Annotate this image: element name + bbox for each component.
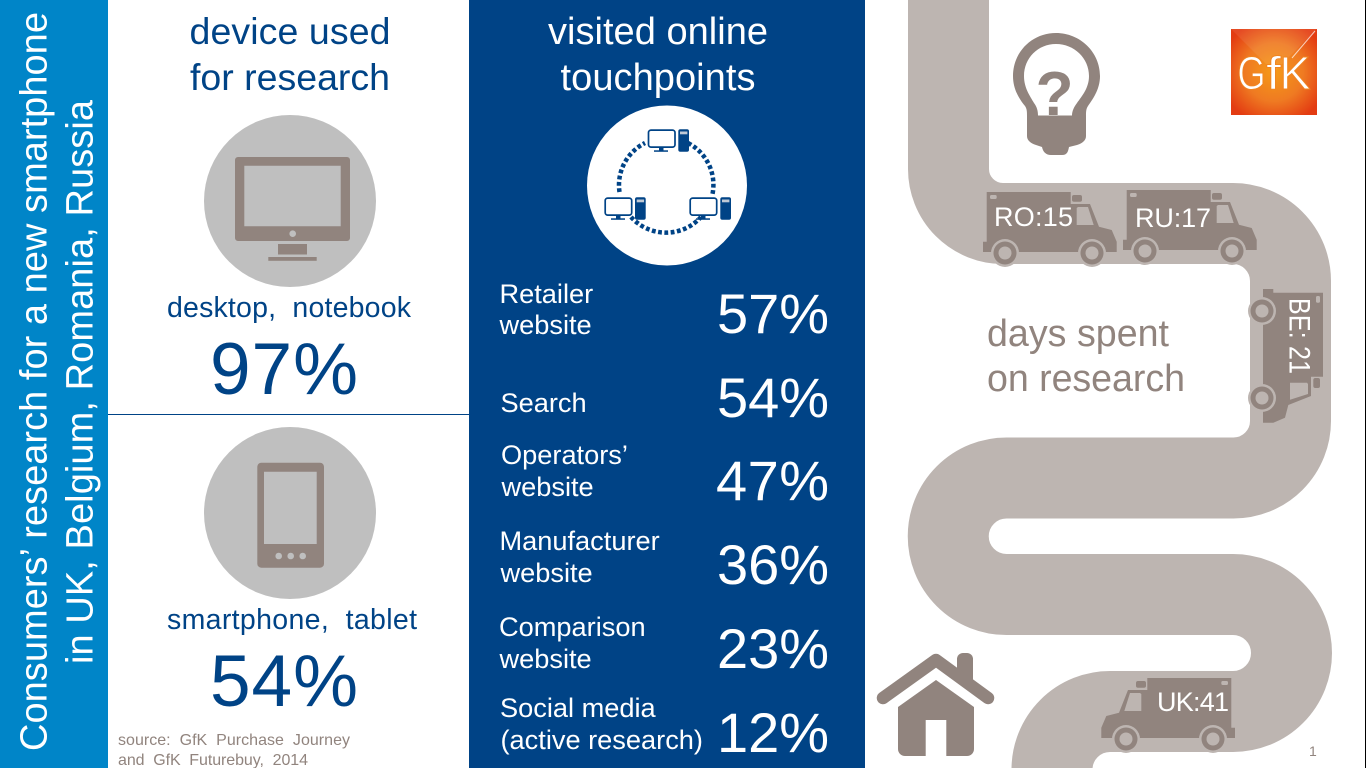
touchpoint: manufacturer website xyxy=(500,525,829,596)
touchpoint: manufacturer website: Manufacturer xyxy=(500,525,660,556)
logo: GfK: K xyxy=(1280,47,1310,99)
truck: UK xyxy=(1101,678,1235,753)
icon: connected computers xyxy=(587,106,747,266)
touchpoint: retailer website: 57% xyxy=(717,282,829,345)
touchpoint: operators' website: Operators’ xyxy=(501,439,628,470)
truck: BE xyxy=(1248,289,1323,423)
panel: device used for research xyxy=(108,10,469,768)
touchpoint: social media: 12% xyxy=(717,701,829,764)
touchpoint: comparison website: 23% xyxy=(717,617,829,680)
touchpoint: search: 54% xyxy=(717,366,829,429)
stat: 97%: 97% xyxy=(210,329,358,410)
truck: RU xyxy=(1123,190,1257,265)
truck: RO: RO:15 xyxy=(994,202,1073,232)
divider line xyxy=(108,414,469,415)
source note: source: GfK Purchase Journey xyxy=(118,732,350,749)
panel: days spent on research xyxy=(883,0,1323,768)
touchpoint: social media xyxy=(500,692,829,764)
title: Consumers’ research for a new smartphone xyxy=(14,12,56,751)
touchpoint: retailer website: website xyxy=(498,309,592,340)
panel: title band xyxy=(0,0,108,768)
touchpoint: retailer website xyxy=(498,278,829,345)
label: smartphone, tablet: smartphone, tablet xyxy=(167,604,417,636)
touchpoint: search: Search xyxy=(500,387,587,418)
heading: visited online touchpoints xyxy=(548,11,768,99)
heading: device used: for research xyxy=(190,56,390,98)
icon: desktop monitor xyxy=(204,115,376,287)
touchpoint: search xyxy=(500,366,829,429)
winding road xyxy=(948,0,1292,768)
icon: light bulb with question mark: ? xyxy=(1036,60,1073,129)
truck: BE: BE: 21 xyxy=(1283,298,1317,374)
slide edge xyxy=(1365,0,1366,768)
logo: GfK: G xyxy=(1238,47,1266,99)
touchpoint: social media: (active research) xyxy=(500,724,703,755)
touchpoint: social media: Social media xyxy=(500,692,657,723)
touchpoint: operators' website: website xyxy=(500,471,594,502)
heading: visited online touchpoints: visited online xyxy=(548,11,768,53)
touchpoint: retailer website: Retailer xyxy=(500,278,593,309)
truck: RU: RU:17 xyxy=(1135,203,1211,233)
touchpoint: manufacturer website: website xyxy=(500,557,593,588)
heading: device used: device used xyxy=(190,10,390,52)
touchpoint: comparison website xyxy=(498,611,829,680)
stat: 54%: 54% xyxy=(210,641,358,722)
touchpoint: comparison website: website xyxy=(498,643,592,674)
heading: visited online touchpoints: touchpoints xyxy=(560,57,756,99)
touchpoint: operators' website xyxy=(500,439,829,512)
logo: GfK xyxy=(1231,29,1317,115)
title: in UK, Belgium, Romania, Russia xyxy=(60,99,102,664)
icon: house xyxy=(883,653,988,756)
touchpoint: operators' website: 47% xyxy=(716,449,829,512)
truck: RO xyxy=(983,192,1117,267)
page number: 1 xyxy=(1309,743,1317,759)
icon: tablet xyxy=(204,427,376,599)
truck: UK: UK:41 xyxy=(1157,687,1229,717)
heading: days spent on research xyxy=(987,312,1185,399)
logo: GfK: f xyxy=(1266,47,1281,99)
icon: light bulb with question mark xyxy=(1013,33,1100,155)
panel: visited online touchpoints xyxy=(469,0,865,768)
touchpoint: manufacturer website: 36% xyxy=(717,533,829,596)
touchpoint: comparison website: Comparison xyxy=(499,611,646,642)
heading: days spent on research: on research xyxy=(987,357,1185,399)
heading: device used xyxy=(190,10,390,98)
label: desktop, notebook: desktop, notebook xyxy=(167,292,412,324)
title xyxy=(14,12,102,751)
heading: days spent on research: days spent xyxy=(987,312,1170,354)
source note xyxy=(118,732,350,768)
